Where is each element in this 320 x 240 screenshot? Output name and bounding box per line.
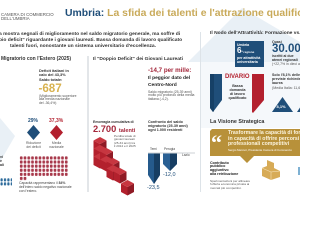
panel: attractiveness [210, 30, 300, 113]
stat: 30.000: atenei regionali [272, 58, 298, 62]
note: improvement: del -36,4%) [39, 101, 56, 105]
contribution note: Sperimentazioni per allineare [210, 179, 250, 183]
heading: double deficit: Il "Doppio Deficit" dei Giovani Laureati [93, 57, 183, 62]
stat: 29%: 29% [28, 118, 38, 124]
intro text: a mostra segnali di miglioramento nel saldo migratorio generale, ma soffre di [0, 32, 180, 37]
bar label perugia: Perugia [164, 147, 175, 151]
contribution note: l'offerta economica privata ai [210, 182, 249, 186]
quote author: Sergio Mercuri, Presidente Camera di Commercio [228, 148, 292, 152]
label: reduction [26, 141, 41, 149]
divider left [87, 56, 89, 192]
intro text [0, 32, 182, 49]
waffle note [19, 181, 72, 193]
waffle people chart [20, 156, 68, 180]
left clipped text: ali [0, 163, 4, 167]
panel: strategic vision [210, 119, 300, 190]
note: improvement [39, 94, 77, 105]
card: umbria 6th [235, 41, 264, 67]
panel: double deficit [93, 56, 195, 196]
card text: per attrattività [237, 56, 260, 60]
stat: 30.000: Quasi [272, 40, 282, 44]
stat: foreign deficit [39, 68, 69, 82]
logo: CAMERA DI COMMERCIO [1, 12, 54, 16]
contribution text: pubblico [210, 164, 225, 168]
note: total loss: Perdita totale di [114, 134, 136, 138]
quote banner [210, 129, 300, 163]
bar label lazio: Lazio [182, 152, 190, 156]
triangles [272, 97, 300, 112]
quote mark: “ [211, 130, 222, 155]
waffle note: Capacità rappresentano il 84% [19, 181, 65, 185]
stat: -14,7: Centro-Nord [148, 83, 177, 88]
stat: 2.700 talenti: 2.700 talenti [93, 124, 135, 134]
chart heading: Confronto del saldo [148, 120, 183, 124]
contribution text: aggiuntivo [210, 168, 229, 172]
note: balance: Saldo migratorio (25-39 anni) [148, 90, 192, 94]
card text: universitaria [237, 60, 258, 64]
icon: gold cubes [262, 160, 280, 180]
left clipped text [0, 155, 4, 167]
left clipped text: vi [0, 155, 3, 159]
chart heading: migratorio (25-39 anni) [148, 124, 188, 128]
stat: foreign deficit: calo del 43,3% [39, 72, 66, 77]
chart: divario columns [210, 74, 264, 113]
waffle note: dell'intero saldo negativo nazionale [19, 185, 72, 189]
note: total loss: il 2014 e il 2025 [114, 144, 136, 148]
quote text: in capacità di offrire percorsi [228, 136, 299, 142]
stat: foreign deficit: Saldo totale: [39, 77, 62, 82]
value: -12,0: -12,0 [163, 172, 176, 178]
note: total loss [114, 134, 136, 148]
card text [237, 43, 260, 64]
stat: -687: -687 [38, 82, 62, 95]
stat: 8,1%: laurea [272, 81, 283, 85]
label: low demand [228, 84, 246, 100]
heading: vision: La Visione Strategica [210, 119, 264, 125]
stat: foreign deficit: Deficit italiani in [39, 68, 69, 73]
intro text: pio deficit" riguardante i giovani laureati. Bassa domanda di lavoro qualificato [0, 38, 182, 43]
divider middle [200, 32, 201, 192]
note: total loss: giovani laureati [114, 137, 135, 141]
label: triangle 8,1%: 8,1% [276, 104, 286, 109]
label: divario: DIVARIO [225, 74, 250, 80]
note: improvement: alla media nazionale [39, 97, 70, 101]
contribution text [210, 160, 238, 176]
note: total loss: (25-34 anni) tra [114, 141, 135, 145]
label: national: nazionale [49, 145, 64, 149]
stat: -14,7: Il peggior dato del [148, 76, 190, 81]
label: low demand: di lavoro [230, 92, 245, 96]
intro text: talenti fuori, nonostante un sistema universitario d'eccellenza. [10, 44, 156, 49]
label: reduction: dei deficit [26, 145, 41, 149]
stat: 8,1% [272, 73, 300, 90]
icon: diamonds [27, 125, 63, 140]
stat: cumulative: Emorragia cumulativa di [93, 120, 134, 124]
contribution note [210, 179, 250, 190]
chart heading [148, 120, 188, 132]
label: national: Media [52, 141, 61, 145]
left clipped text: e [0, 159, 2, 163]
card text: 6ª regione [237, 46, 254, 55]
contribution text: alla retribuzione [210, 172, 238, 176]
background decoration [0, 8, 300, 160]
note: balance: molto più profondo della media [148, 93, 194, 97]
icon: blue partial [298, 167, 301, 175]
chart heading: ogni 1.000 residenti [148, 128, 182, 132]
label: national [49, 141, 64, 149]
bar label terni: Terni [150, 147, 157, 151]
label: low demand: qualificato [228, 96, 246, 100]
note: improvement: (Miglioramento superiore [39, 94, 77, 98]
label: reduction: Riduzione [26, 141, 41, 145]
note: balance: italiana (-4,2). [148, 97, 169, 101]
stat: 37,3%: 37,3% [49, 118, 63, 124]
quote text: professionali competitivi [228, 141, 289, 147]
stat: -14,7: -14,7 per mille: [148, 67, 191, 74]
heading: migratory: Migratorio con l'Estero (2025) [1, 56, 71, 62]
value: -23,5: -23,5 [147, 185, 160, 191]
stat: 30.000: iscritti ai due [272, 54, 294, 58]
quote text [228, 130, 300, 147]
card text: Umbria [237, 43, 249, 47]
icon: blue people [0, 178, 12, 186]
stat: -14,7 [148, 67, 191, 88]
logo [1, 12, 54, 21]
note: balance [148, 90, 194, 101]
label: low demand: domanda [230, 88, 245, 92]
logo: DELL'UMBRIA [1, 16, 30, 21]
contribution note: mercati più competitivi. [210, 186, 241, 190]
label: low demand: Bassa [232, 84, 243, 88]
waffle note: con l'estero. [19, 189, 37, 193]
chart: staircase of cubes [94, 137, 134, 196]
stat: 30.000 [272, 40, 300, 66]
panel: migratory balance [0, 56, 77, 193]
chart: bars [148, 152, 195, 184]
contribution text: Contributo [210, 160, 229, 164]
